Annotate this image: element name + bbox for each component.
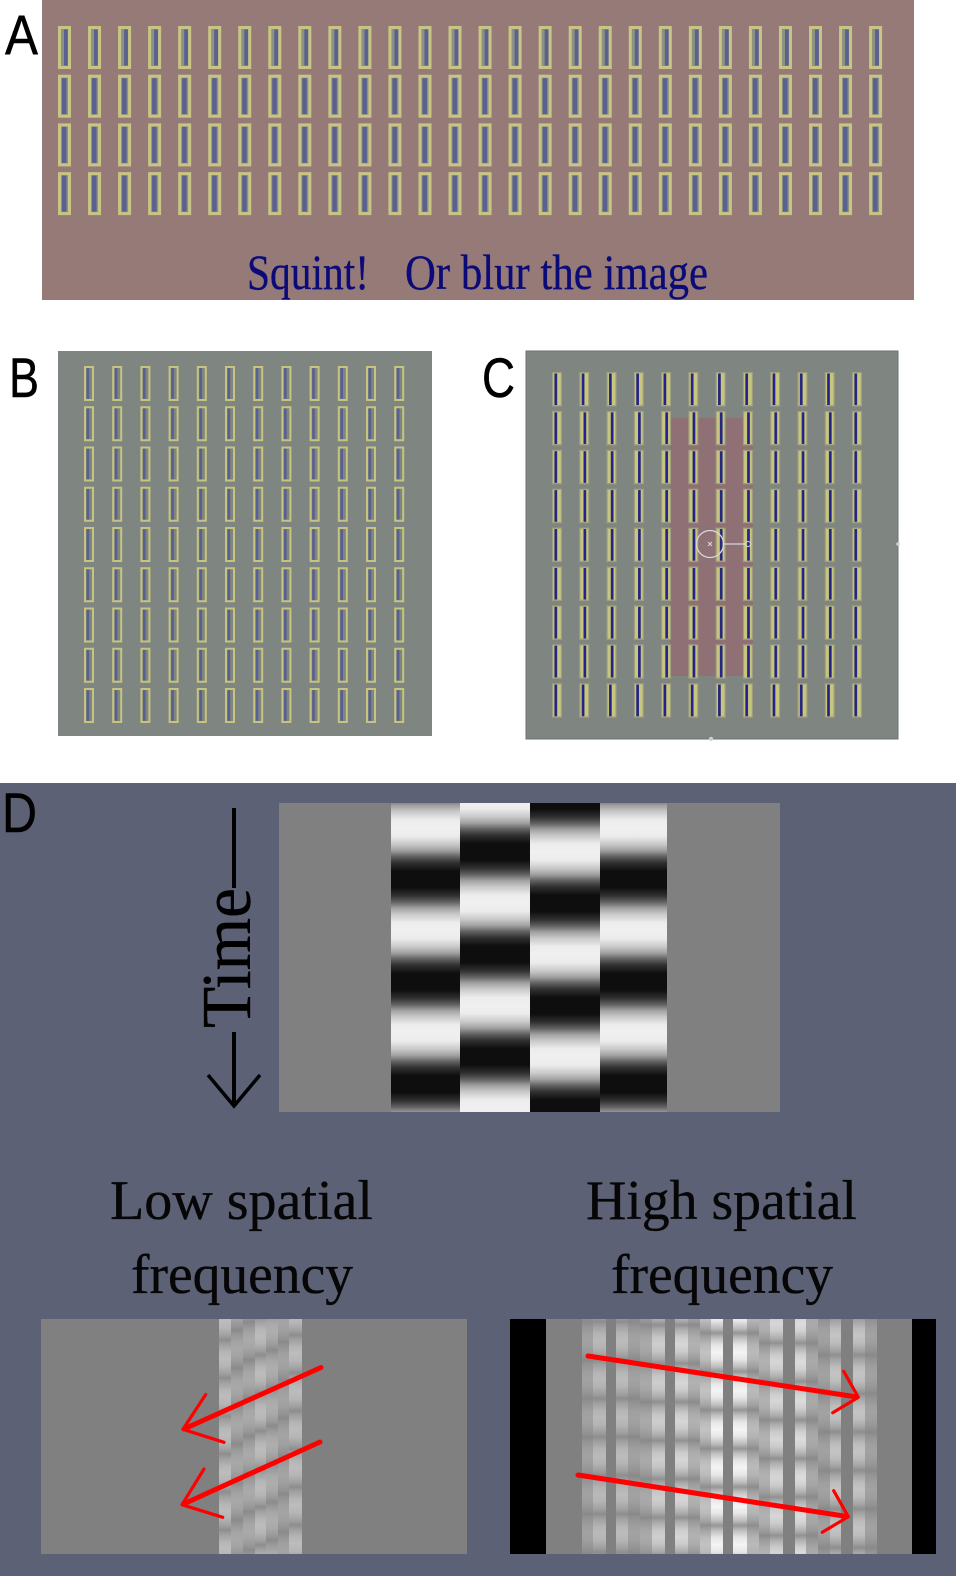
heading: low spatial frequency: Low spatial bbox=[110, 1170, 373, 1232]
time axis arrow: Time bbox=[189, 888, 266, 1028]
high frequency grating strips bbox=[582, 1319, 877, 1554]
heading: high spatial frequency: frequency bbox=[611, 1244, 833, 1306]
heading: low spatial frequency: frequency bbox=[131, 1244, 353, 1306]
panel A caption bbox=[247, 244, 708, 300]
label C: C bbox=[482, 346, 515, 409]
cursor handle bbox=[696, 530, 900, 741]
panel B: bar grid on gray background bbox=[58, 351, 432, 736]
panel A caption: Squint! bbox=[247, 244, 369, 300]
pink central patch bbox=[670, 418, 753, 676]
label A: A bbox=[5, 3, 39, 66]
heading: low spatial frequency bbox=[110, 1170, 373, 1306]
label B: B bbox=[9, 346, 39, 409]
panel C bar grid bbox=[552, 372, 862, 718]
heading: high spatial frequency: High spatial bbox=[586, 1170, 857, 1232]
red arrows pointing down-right bbox=[578, 1356, 858, 1532]
panel A: bar grid on pink background bbox=[42, 0, 914, 300]
low frequency stimulus panel bbox=[41, 1319, 467, 1554]
low frequency grating strips bbox=[219, 1319, 302, 1554]
high frequency stimulus panel bbox=[510, 1319, 936, 1554]
panel A caption: Or blur the image bbox=[405, 244, 708, 300]
label D: D bbox=[2, 781, 37, 844]
heading: high spatial frequency bbox=[586, 1170, 857, 1306]
panel C: bar grid with pink central patch bbox=[526, 351, 900, 741]
time axis arrow bbox=[189, 808, 266, 1106]
red arrows pointing down-left bbox=[182, 1368, 321, 1517]
panel B bar grid bbox=[84, 366, 404, 723]
top grating stimulus bbox=[279, 803, 780, 1112]
panel D: dark slate background bbox=[0, 781, 956, 1576]
panel A bar grid bbox=[58, 26, 882, 215]
